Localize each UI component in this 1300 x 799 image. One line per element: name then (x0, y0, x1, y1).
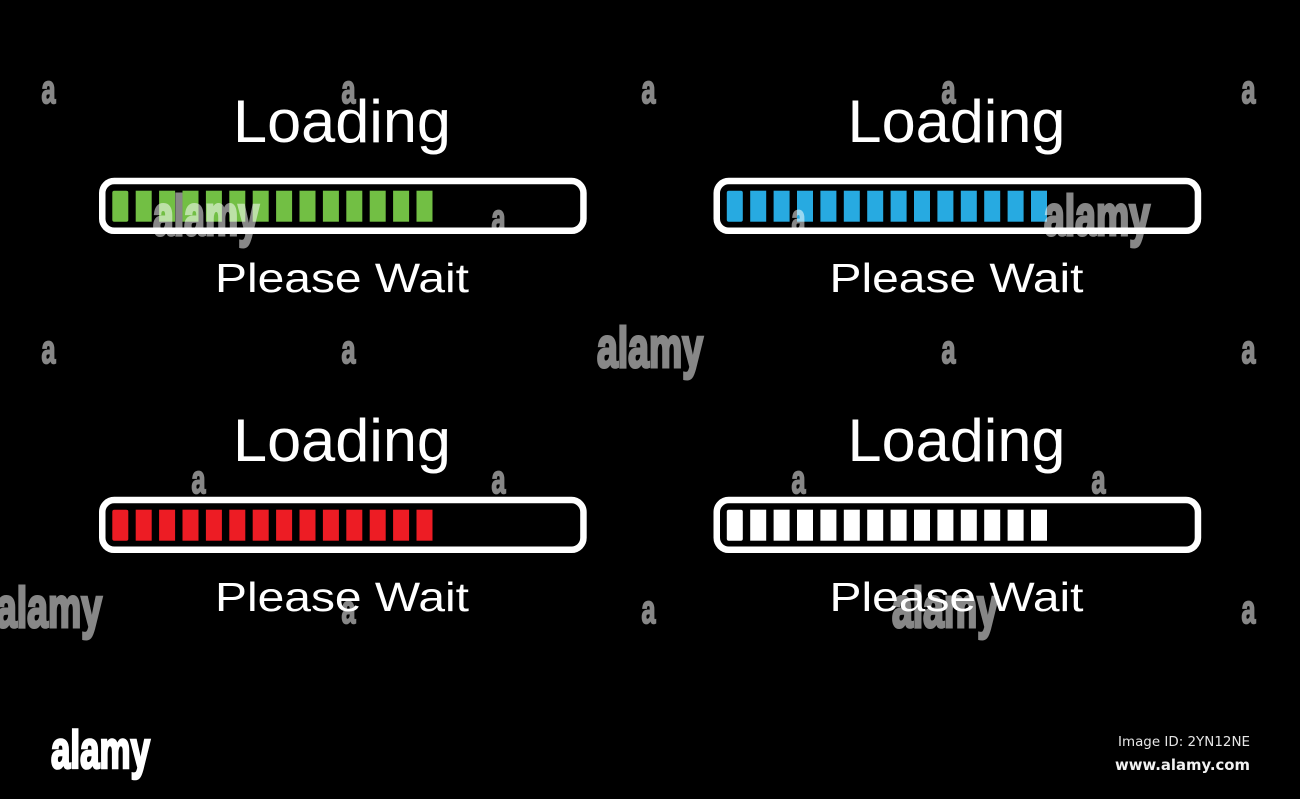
watermark: small a marks: a (492, 458, 506, 502)
heading: white loader: Loading (848, 407, 1066, 474)
watermark: small a marks: a (1242, 328, 1256, 372)
watermark: small a marks: a (942, 68, 956, 112)
watermark: large alamy marks: alamy (597, 316, 703, 380)
watermark: small a marks: a (342, 328, 356, 372)
watermark: small a marks: a (342, 68, 356, 112)
watermark: large alamy marks: alamy (1044, 184, 1150, 248)
watermark: small a marks: a (942, 328, 956, 372)
watermark: small a marks: a (192, 458, 206, 502)
watermark: small a marks: a (342, 588, 356, 632)
progress bar: blue (717, 181, 1198, 231)
watermark: large alamy marks (0, 184, 1150, 640)
progress bar: green (102, 181, 583, 231)
watermark: large alamy marks: alamy (0, 576, 102, 640)
watermark: small a marks: a (642, 68, 656, 112)
caption: green loader: Please Wait (215, 255, 470, 301)
caption: red loader: Please Wait (215, 574, 470, 620)
watermark: small a marks: a (792, 458, 806, 502)
progress bar: white (717, 500, 1198, 550)
heading: green loader: Loading (233, 88, 451, 155)
panel: blue loader (717, 88, 1198, 301)
watermark: small a marks: a (42, 328, 56, 372)
panel: green loader (102, 88, 583, 301)
heading: red loader: Loading (233, 407, 451, 474)
text: website: www.alamy.com (1115, 756, 1250, 774)
text: image id: Image ID: 2YN12NE (1118, 735, 1250, 750)
watermark: small a marks: a (42, 68, 56, 112)
progress bar: red (102, 500, 583, 550)
panel: white loader (717, 407, 1198, 620)
watermark: small a marks: a (492, 197, 506, 241)
watermark: small a marks: a (642, 588, 656, 632)
watermark: small a marks: a (1242, 588, 1256, 632)
watermark: large alamy marks: alamy (153, 184, 259, 248)
watermark: large alamy marks: alamy (892, 576, 998, 640)
watermark: small a marks: a (792, 197, 806, 241)
logo: alamy: alamy (51, 721, 150, 780)
caption: white loader: Please Wait (830, 574, 1084, 620)
watermark: small a marks: a (1242, 68, 1256, 112)
heading: blue loader: Loading (848, 88, 1066, 155)
watermark: small a marks (42, 68, 1256, 632)
caption: blue loader: Please Wait (830, 255, 1084, 301)
panel: red loader (102, 407, 583, 620)
watermark: small a marks: a (1092, 458, 1106, 502)
